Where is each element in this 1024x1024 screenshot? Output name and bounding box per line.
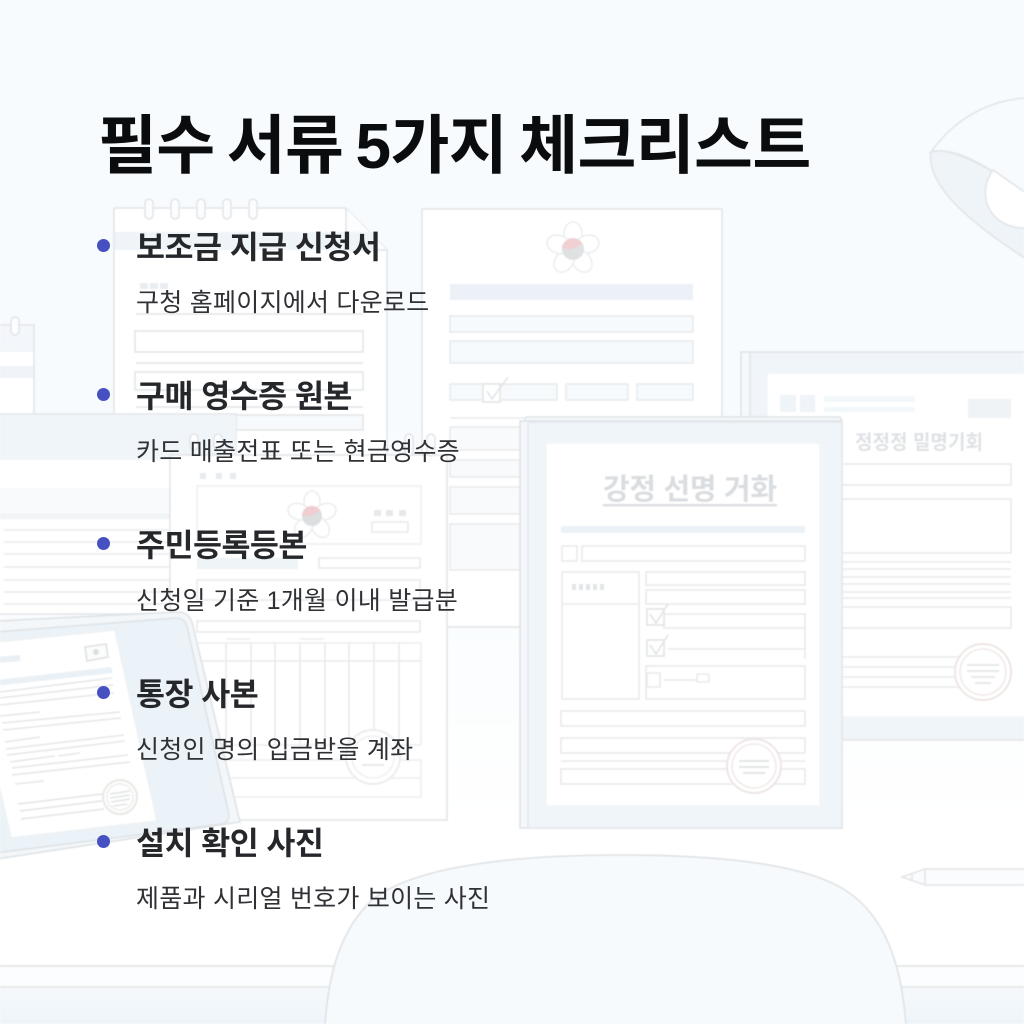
seal stamped form	[346, 730, 400, 784]
bullet	[97, 835, 110, 848]
flag	[85, 644, 108, 661]
checklist item 4	[97, 676, 413, 764]
emblem top	[545, 222, 601, 276]
item description: 카드 매출전표 또는 현금영수증	[136, 438, 460, 466]
bullet	[97, 686, 110, 699]
seal right	[955, 644, 1011, 700]
window document left	[0, 414, 236, 614]
item heading: 주민등록등본	[136, 527, 307, 563]
item heading: 구매 영수증 원본	[136, 378, 352, 414]
checklist item 1	[97, 229, 429, 317]
item description: 제품과 시리얼 번호가 보이는 사진	[136, 885, 490, 913]
item heading: 설치 확인 사진	[136, 825, 323, 861]
front certificate document	[520, 417, 842, 828]
lamp shape top right	[931, 98, 1024, 259]
tablet with document	[0, 612, 240, 859]
stamped form document	[170, 434, 447, 820]
pen	[902, 869, 1024, 885]
certificate heading: 강정 선명 거화	[603, 473, 777, 506]
official form document	[422, 209, 722, 627]
item description: 신청일 기준 1개월 이내 발급분	[136, 587, 458, 615]
bullet	[97, 388, 110, 401]
checklist item 3	[97, 527, 458, 615]
certificate heading: 정정정 밀명기회	[855, 431, 983, 454]
desk	[0, 966, 1024, 1024]
item heading: 보조금 지급 신청서	[136, 229, 380, 265]
item description: 신청인 명의 입금받을 계좌	[136, 736, 413, 764]
framed certificate right	[741, 352, 1024, 740]
seal tablet	[103, 780, 137, 814]
item heading: 통장 사본	[136, 676, 258, 712]
item description: 구청 홈페이지에서 다운로드	[136, 289, 429, 317]
emblem center	[286, 491, 338, 541]
chair back	[325, 855, 906, 1024]
bullet	[97, 537, 110, 550]
notepad document	[114, 199, 387, 470]
checklist item 5	[97, 825, 490, 913]
calendar left	[0, 317, 34, 425]
seal front	[727, 739, 781, 793]
checklist item 2	[97, 378, 460, 466]
bullet	[97, 239, 110, 252]
title: 필수 서류 5가지 체크리스트	[98, 110, 811, 182]
